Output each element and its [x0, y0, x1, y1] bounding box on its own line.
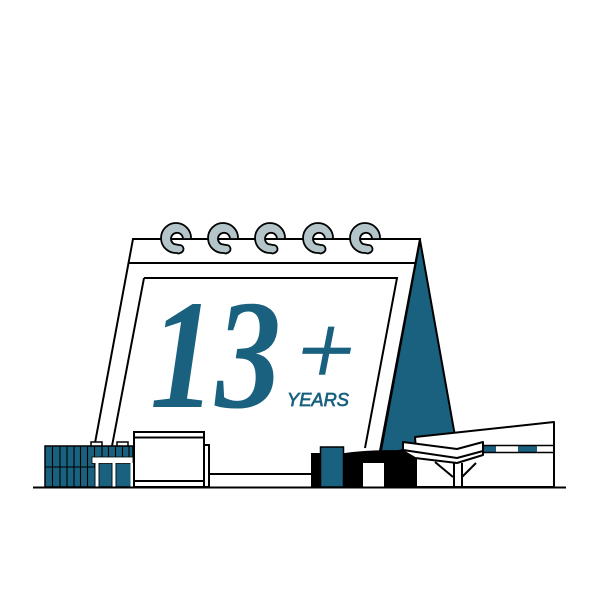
spiral rings	[161, 223, 380, 254]
plus sign: +	[287, 295, 367, 406]
calendar page	[93, 239, 420, 474]
calendar back stand	[380, 240, 455, 456]
years label: YEARS	[287, 389, 350, 410]
center building: black mass	[311, 447, 416, 487]
left building: teal louvred block	[45, 442, 133, 487]
right building	[403, 422, 554, 487]
ground line	[33, 486, 566, 488]
left building: white block	[134, 432, 209, 487]
number 13: 13	[150, 268, 281, 441]
